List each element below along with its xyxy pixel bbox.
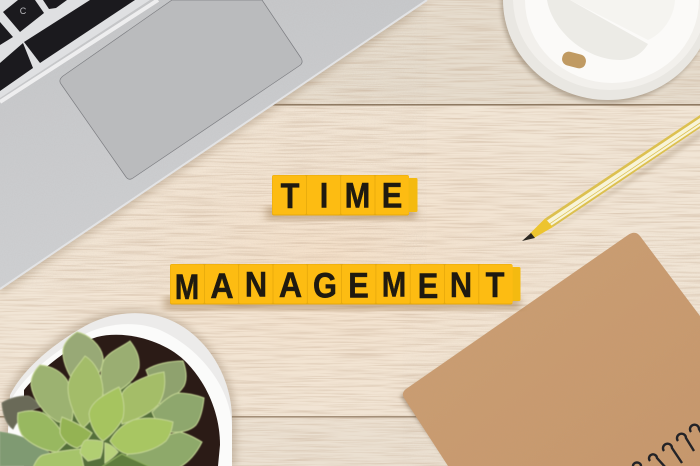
- lid raised flap: [570, 0, 675, 40]
- keyboard well: [0, 0, 150, 98]
- leaf top: [101, 341, 139, 398]
- keyboard keys: [0, 0, 135, 91]
- centre bud: [80, 440, 103, 461]
- leaf upper middle: [68, 356, 103, 428]
- leaf bottom: [33, 449, 84, 466]
- sip hole: [561, 50, 587, 70]
- block: N: [445, 264, 478, 304]
- block: A: [273, 264, 307, 305]
- coffee cup lid: [501, 0, 700, 103]
- block: N: N: [450, 265, 472, 304]
- laptop: [0, 0, 427, 295]
- block: T: T: [486, 265, 504, 304]
- block: N: N: [245, 265, 267, 304]
- lid recess: [547, 0, 648, 60]
- plant pot: [2, 309, 236, 466]
- soil: [24, 335, 220, 466]
- succulent plant: [0, 332, 204, 466]
- pencil: [522, 115, 700, 241]
- block: T: [479, 264, 513, 304]
- key letter: C: [20, 6, 27, 16]
- leaf centre: [89, 387, 124, 441]
- block word: MANAGEMENT: [164, 264, 520, 310]
- leaf bottom left grey: [0, 432, 50, 466]
- block: G: [308, 264, 341, 305]
- block: A: A: [210, 268, 234, 306]
- block: I: I: [320, 176, 328, 215]
- block: A: A: [279, 267, 302, 305]
- block: E: [375, 176, 409, 215]
- leaf small centre left: [60, 417, 92, 448]
- block: E: E: [382, 176, 402, 215]
- spiral binding: [633, 425, 700, 466]
- leaf lower right: [126, 432, 202, 466]
- block: M: M: [382, 265, 406, 304]
- trackpad: [60, 0, 302, 179]
- block: M: [170, 264, 204, 307]
- leaf left lower: [18, 411, 67, 452]
- dead leaf: [2, 396, 40, 429]
- leaf inner bottom: [100, 454, 152, 466]
- block: E: [411, 264, 444, 305]
- block: A: [205, 264, 238, 306]
- notebook: [400, 233, 700, 466]
- block: E: E: [348, 266, 369, 305]
- block: T: [272, 176, 306, 215]
- block: I: [307, 176, 340, 215]
- block: M: M: [345, 176, 370, 215]
- block: E: [342, 264, 376, 305]
- plant core shadow: [40, 377, 164, 466]
- leaf upper right: [146, 361, 186, 404]
- block: N: [239, 264, 273, 304]
- block: E: E: [418, 266, 438, 305]
- leaf right: [152, 393, 204, 432]
- leaf middle right: [121, 372, 165, 424]
- block word: TIME: [266, 175, 418, 220]
- block: T: T: [281, 176, 299, 215]
- block: G: G: [313, 266, 337, 305]
- centre bud right: [105, 443, 118, 463]
- leaf left: [31, 365, 73, 422]
- leaf back top: [63, 332, 103, 388]
- block: M: M: [175, 268, 199, 307]
- leaf bottom centre right: [110, 418, 173, 454]
